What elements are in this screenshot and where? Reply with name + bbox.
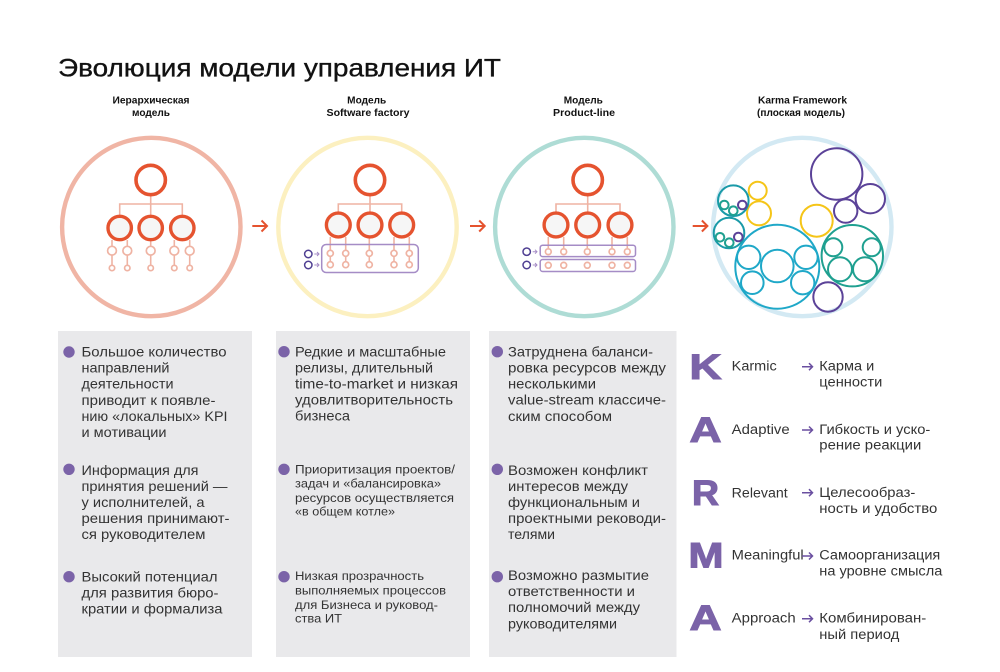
bullet 1: нию «локальных» KPI [82, 409, 228, 424]
bullet 1: и мотивации [82, 425, 166, 440]
row: Karmic [690, 348, 882, 390]
panel: hierarchical model [58, 331, 252, 657]
row: Meaningful: Meaningful [732, 548, 804, 563]
bullet 1: Большое количество [82, 345, 226, 360]
row: Approach: Комбинирован- [819, 611, 926, 626]
bullet 1 [278, 345, 458, 423]
bullet 2: у исполнителей, а [82, 495, 205, 510]
heading: karma framework: Karma Framework [758, 96, 848, 107]
bullet 2: Приоритизация проектов/ [295, 462, 456, 476]
bullet 3: ства ИТ [295, 611, 343, 625]
bullet 1: Затруднена баланси- [508, 345, 653, 360]
row: Approach: Approach [732, 611, 796, 626]
heading: karma framework [757, 96, 848, 119]
heading: software factory model: Software factory [326, 108, 410, 119]
bullet 2: решения принимают- [82, 511, 230, 526]
bullet 3: Возможно размытие [508, 568, 649, 583]
bullet 3: Низкая прозрачность [295, 569, 424, 583]
heading: product-line model [553, 96, 616, 119]
bullet 3 [492, 568, 649, 631]
row: Karmic: Карма и [819, 359, 874, 374]
bullet 1: несколькими [508, 376, 596, 391]
bullet 2: функциональным и [508, 495, 640, 510]
bullet 2: принятия решений — [82, 479, 228, 494]
bullet 2: проектными реководи- [508, 511, 666, 526]
bullet 2: задач и «балансировка» [295, 477, 441, 491]
bullet 3: Высокий потенциал [82, 570, 218, 585]
bullet 1: Редкие и масштабные [295, 345, 446, 360]
row: Relevant: R [692, 474, 719, 513]
bullet 1: value-stream классиче- [508, 393, 666, 408]
bullet 2: телями [508, 527, 555, 542]
heading: hierarchical model: модель [132, 108, 170, 119]
row: Relevant: Целесообраз- [819, 485, 915, 500]
row: Approach [690, 599, 926, 642]
arrow: product-line to karma [693, 220, 707, 232]
bullet 3: кратии и формализа [82, 602, 223, 617]
diagram: software factory model [278, 138, 457, 316]
bullet 1: ровка ресурсов между [508, 361, 666, 376]
row: Karmic: K [690, 348, 722, 387]
heading: product-line model: Product-line [553, 108, 616, 119]
bullet 3 [63, 570, 223, 617]
heading: hierarchical model: Иерархическая [112, 96, 190, 107]
heading: hierarchical model [112, 96, 190, 119]
bullet 1 [63, 345, 227, 440]
bullet 2: ся руководителем [82, 527, 206, 542]
bullet 1: time-to-market и низкая [295, 376, 458, 391]
bullet 1: ским способом [508, 409, 612, 424]
panel: product-line model [489, 331, 676, 657]
bullet 3: руководителями [508, 616, 617, 631]
title: Эволюция модели управления ИТ [58, 56, 501, 83]
bullet 3 [278, 569, 446, 625]
bullet 2: ресурсов осуществляется [295, 491, 454, 505]
heading: karma framework: (плоская модель) [757, 108, 845, 119]
bullet 2 [63, 463, 229, 542]
row: Approach: ный период [819, 627, 899, 642]
row: Adaptive: Гибкость и уско- [819, 422, 930, 437]
bullet 1: деятельности [82, 377, 174, 392]
bullet 1: бизнеса [295, 408, 350, 423]
bullet 3: для развития бюро- [82, 586, 218, 601]
row: Relevant: Relevant [732, 485, 788, 500]
panel: software factory model [276, 331, 470, 657]
heading: product-line model: Модель [564, 96, 603, 107]
diagram: product-line model [495, 138, 674, 316]
bullet 3: ответственности и [508, 584, 635, 599]
bullet 2 [278, 462, 456, 519]
row: Karmic: ценности [819, 375, 882, 390]
arrow: software factory to product-line [470, 220, 485, 232]
row: Relevant: ность и удобство [819, 501, 937, 516]
bullet 1: направлений [82, 361, 170, 376]
row: Adaptive: Adaptive [732, 422, 790, 437]
bullet 2: «в общем котле» [295, 505, 395, 519]
bullet 1: приводит к появле- [82, 393, 216, 408]
bullet 3: выполняемых процессов [295, 583, 446, 597]
row: Meaningful [688, 536, 943, 578]
row: Adaptive [690, 411, 930, 453]
bullet 2: Информация для [82, 463, 198, 478]
panel: KARMA list [688, 348, 943, 642]
bullet 1: удовлитворительность [295, 392, 453, 407]
bullet 2: интересов между [508, 479, 628, 494]
bullet 1: релизы, длительный [295, 360, 433, 375]
row: Meaningful: Самоорганизация [819, 548, 940, 563]
row: Karmic: Karmic [732, 359, 777, 374]
row: Approach: A [690, 599, 722, 638]
row: Meaningful: на уровне смысла [819, 564, 943, 578]
bullet 1 [492, 345, 666, 424]
heading: software factory model [326, 96, 410, 119]
bullet 2: Возможен конфликт [508, 463, 648, 478]
diagram: karma framework [713, 138, 892, 316]
row: Adaptive: рение реакции [819, 438, 921, 453]
row: Meaningful: M [688, 536, 724, 576]
row: Adaptive: A [690, 411, 722, 450]
diagram: hierarchical model [62, 138, 240, 316]
heading: software factory model: Модель [347, 96, 386, 107]
bullet 3: полномочий между [508, 600, 640, 615]
row: Relevant [692, 474, 937, 516]
bullet 3: для Бизнеса и руковод- [295, 598, 438, 612]
bullet 2 [492, 463, 666, 542]
arrow: hierarchical to software factory [252, 220, 267, 232]
